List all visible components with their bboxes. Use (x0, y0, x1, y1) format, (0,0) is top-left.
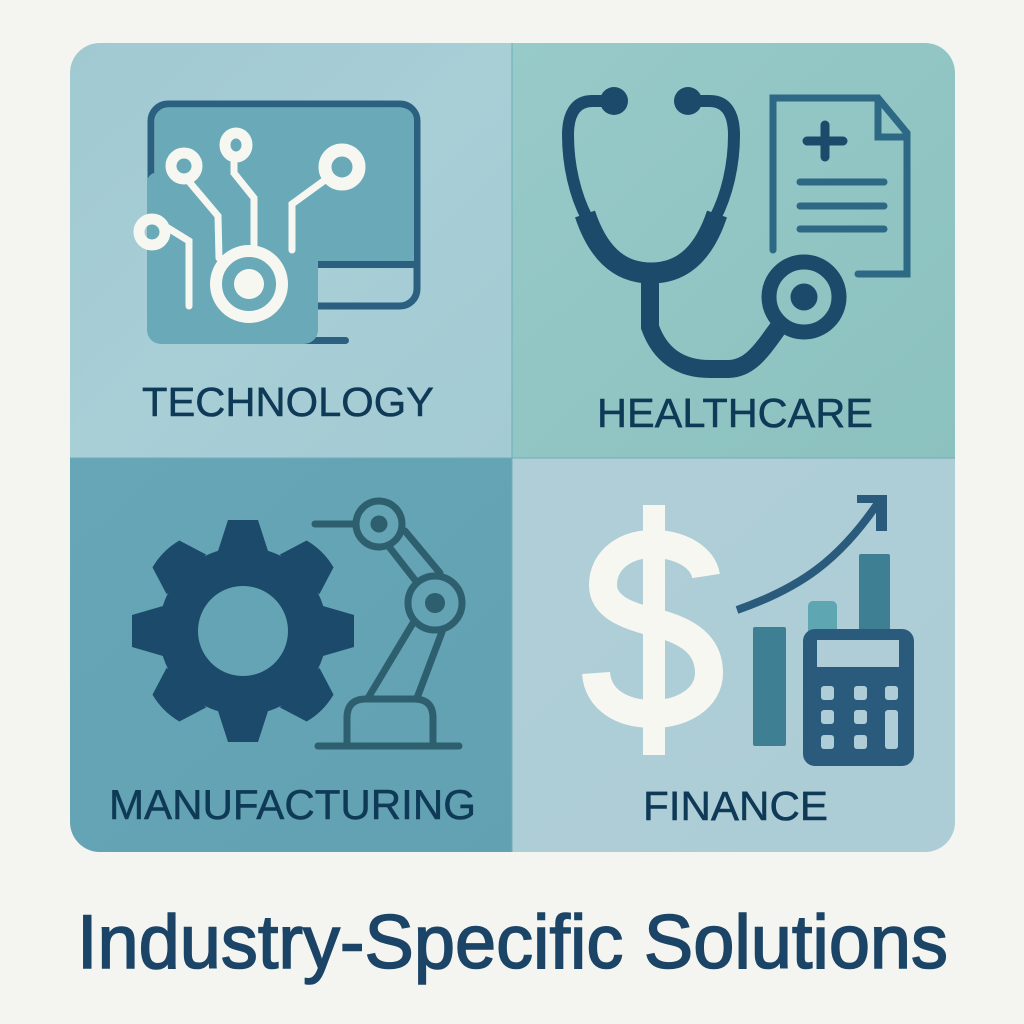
panel: technology (70, 43, 512, 458)
lower links (368, 623, 442, 698)
icon: gear (132, 520, 354, 742)
floor line (318, 742, 459, 750)
icon: robot arm (315, 501, 462, 746)
monitor divider (318, 261, 417, 268)
title: Industry-Specific Solutions (77, 900, 948, 985)
icon: technology monitor with circuit (139, 104, 417, 344)
monitor stand (300, 337, 349, 344)
chest piece (769, 262, 839, 332)
monitor screen (155, 108, 414, 261)
plus sign (807, 125, 843, 157)
circuit centre dot (234, 269, 264, 299)
ear tubes (568, 101, 614, 218)
icon: dollar sign (596, 505, 709, 755)
circuit traces (168, 160, 325, 306)
label: healthcare: HEALTHCARE (597, 390, 873, 436)
page outline (773, 98, 907, 274)
icon: stethoscope (568, 87, 839, 369)
panel: healthcare (512, 43, 955, 458)
monitor outline (151, 104, 417, 306)
circuit backing panel (147, 172, 318, 344)
bar chart (753, 554, 890, 746)
icon: medical document (773, 98, 907, 274)
icon: growth arrow (737, 495, 887, 610)
text lines (800, 182, 884, 229)
yoke (585, 214, 717, 273)
panel grid (70, 43, 955, 852)
lower joint (408, 576, 462, 630)
icon: calculator (803, 629, 914, 766)
gripper bar (315, 520, 355, 528)
upper links (390, 531, 440, 580)
panel: finance (512, 458, 955, 852)
label: technology: TECHNOLOGY (142, 379, 434, 425)
page fold (878, 98, 907, 137)
label: finance: FINANCE (643, 783, 828, 829)
base (347, 699, 433, 746)
circuit nodes (139, 133, 359, 317)
upper joint (356, 501, 402, 547)
ear tips (600, 87, 628, 115)
label: manufacturing: MANUFACTURING (109, 781, 476, 828)
panel: manufacturing (70, 458, 512, 852)
lower tube (650, 280, 778, 369)
